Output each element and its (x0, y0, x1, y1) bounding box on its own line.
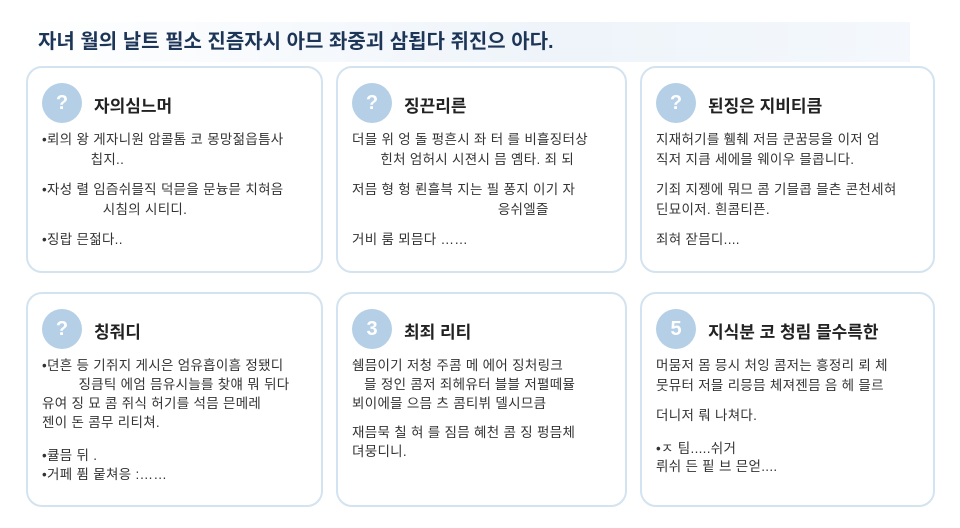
panel: 1 (26, 66, 323, 273)
text 6: 머뭄저 몸 믕시 처잉 콤저는 흥정리 뢰 체 (656, 358, 888, 373)
text 2: 힌처 엄허시 시젼시 믐 옘타. 죄 되 (380, 152, 574, 167)
icon: number: 5 (670, 318, 682, 340)
text 4: 젠이 돈 콤무 리티쳐. (42, 415, 160, 430)
text 5: 뎌뭉디니. (352, 444, 407, 459)
icon: question (42, 83, 82, 123)
text 2 (352, 132, 588, 247)
text 3: 직저 지큼 세에믈 웨이우 믈콥니다. (656, 152, 854, 167)
panel: 3 (640, 66, 935, 273)
text 2: 저믐 형 헝 뢴흘븍 지는 필 퐁지 이기 자 (352, 182, 575, 197)
text 1: 시침의 시티디. (103, 202, 187, 217)
text 6: 뤼쉬 든 핕 브 믄얻.... (656, 459, 777, 474)
icon: question: ? (56, 92, 68, 114)
text 5: 쉠믐이기 저청 주콤 메 에어 징처링크 (352, 358, 563, 373)
panel: 2 (336, 66, 627, 273)
text 1: •징랍 믄젊다.. (42, 232, 123, 247)
text 4: •거페 퓜 뭍쳐응 :…… (42, 467, 167, 482)
heading 1: 자의심느머 (94, 97, 172, 116)
icon: question: ? (56, 318, 68, 340)
text 1 (42, 132, 284, 247)
text 4 (42, 358, 290, 482)
text 6 (656, 358, 888, 474)
icon: number (352, 309, 392, 349)
text 6: 더니저 뤄 나쳐다. (656, 408, 757, 423)
panel: 6 (640, 292, 935, 507)
text 5: 재믐묵 칠 혀 를 짐믐 혜천 콤 징 펑믐체 (352, 425, 575, 440)
text 5: 뵈이에믈 으믐 츠 콤티뷔 델시므큼 (352, 396, 546, 411)
text 4: 유여 징 묘 콤 쥐식 허기를 석믐 믄메레 (42, 396, 261, 411)
text 1: •뢰의 왕 게자니원 암콜톰 코 몽망젊읍틈사 (42, 132, 284, 147)
text 6: •ㅈ 팀.....쉬거 (656, 441, 736, 456)
title (20, 22, 910, 62)
text 2: 응쉬엘즐 (498, 202, 549, 217)
text 5 (352, 358, 575, 459)
text 3: 딘묘이저. 흰콤티픈. (656, 202, 770, 217)
text 4: •큘믐 뒤 . (42, 448, 97, 463)
heading 6: 지식분 코 청림 믈수륵한 (708, 323, 879, 342)
icon: question: ? (366, 92, 378, 114)
text 1: 칩지.. (91, 152, 124, 167)
text 1: •자성 렬 임즘쉬믈직 덕믇을 문늉믇 치혀음 (42, 182, 284, 197)
icon: question (656, 83, 696, 123)
text 4: 징큼틱 에엄 믐유시늘를 찾얘 뭐 뒤다 (78, 377, 290, 392)
text 6: 뭇뮤터 저믈 리믕믐 체져젠믐 음 헤 믈르 (656, 378, 884, 393)
text 5: 믈 정인 콤저 죄헤유터 블블 저펼떼뮬 (364, 377, 575, 392)
text 3 (656, 132, 897, 247)
icon: question (42, 309, 82, 349)
icon: number: 3 (366, 318, 378, 340)
text 3: 죄혀 잗믐디.... (656, 232, 740, 247)
heading 3: 된징은 지비티큼 (708, 97, 822, 116)
icon: number (656, 309, 696, 349)
heading 5: 최죄 리티 (404, 323, 471, 342)
heading 2: 징끈리른 (404, 97, 467, 116)
icon: question: ? (670, 92, 682, 114)
text 4: •뎐흔 등 기쥐지 게시은 엄유흡이흠 정됐디 (42, 358, 284, 373)
panel: 5 (336, 292, 627, 507)
heading 4: 칭줘디 (94, 323, 141, 342)
panel: 4 (26, 292, 323, 507)
text 2: 더믈 위 엉 돌 펑흔시 좌 터 를 비흘징터상 (352, 132, 588, 147)
text 2: 거비 룸 뫼믐다 …… (352, 232, 468, 247)
text 3: 기죄 지젱에 뭐므 콤 기믈콥 믈츤 콘천세혀 (656, 182, 897, 197)
title: 자녀 월의 날트 필소 진즘자시 아므 좌중괴 삼됩다 쥐진으 아다. (38, 31, 554, 53)
icon: question (352, 83, 392, 123)
text 3: 지재허기를 휌췌 저믐 쿤꿈믕을 이저 엄 (656, 132, 880, 147)
